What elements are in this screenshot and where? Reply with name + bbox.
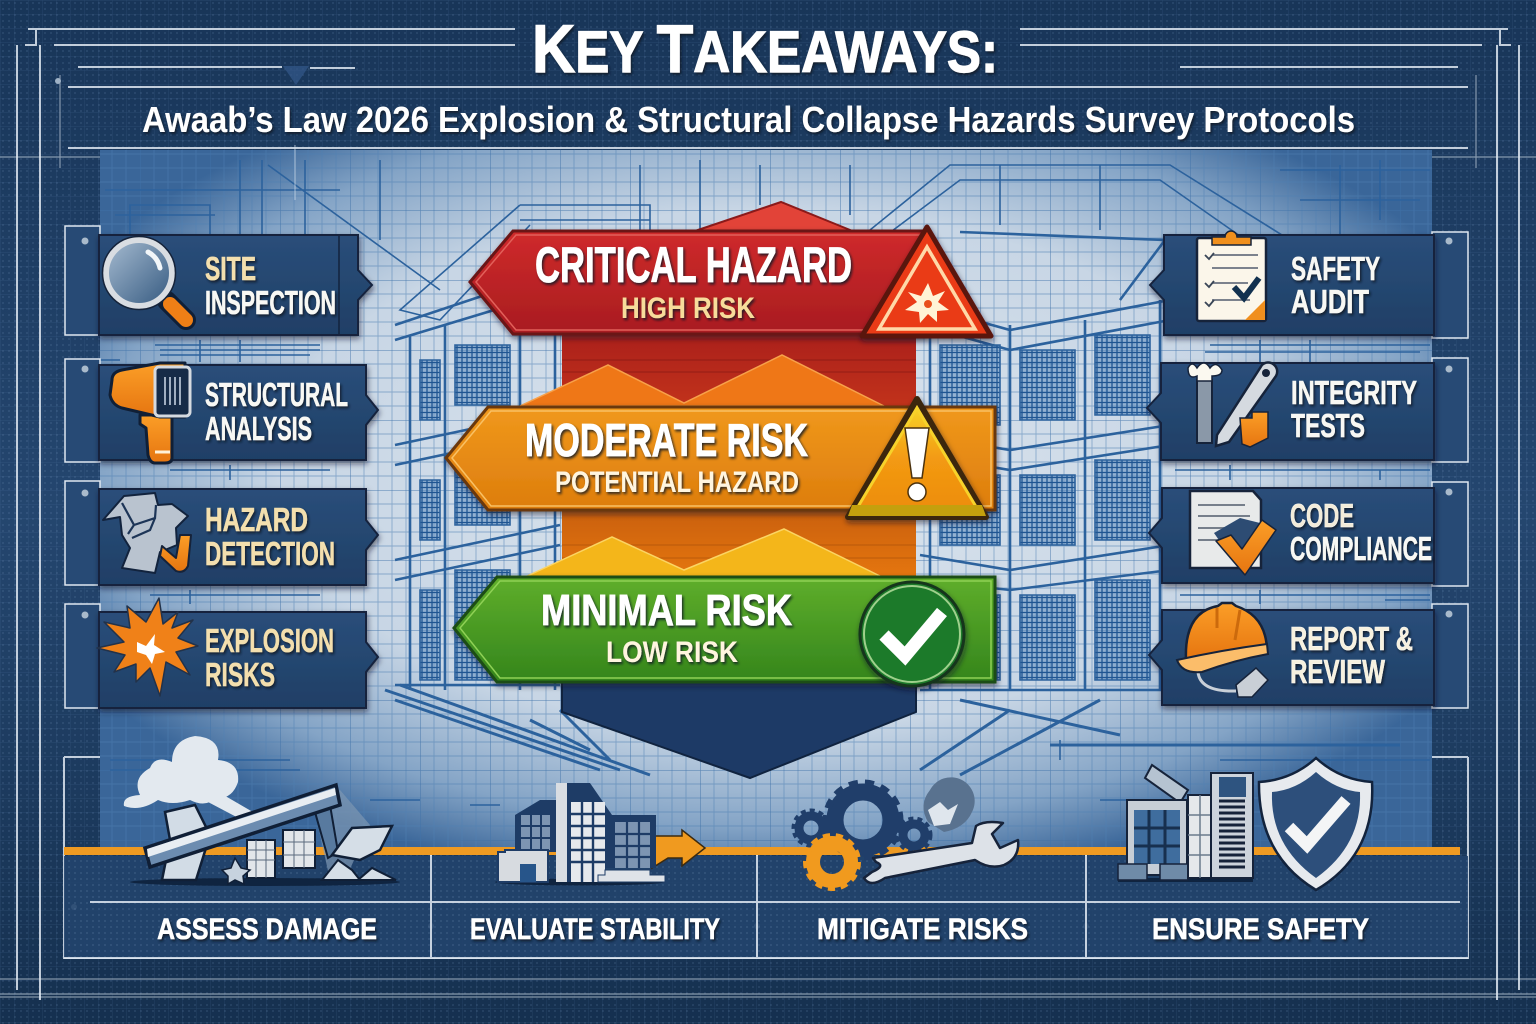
card: code compliance xyxy=(1149,482,1468,586)
central risk stack xyxy=(446,202,995,778)
card: report and review xyxy=(1149,603,1468,708)
blueprint panel xyxy=(100,150,1432,855)
panel: right column xyxy=(1147,231,1468,708)
icon: document with check xyxy=(1190,491,1276,575)
card: site inspection xyxy=(65,226,372,335)
label: high risk: HIGH RISK xyxy=(621,292,755,325)
label: integrity tests: TESTS xyxy=(1291,407,1365,444)
label: structural analysis: ANALYSIS xyxy=(205,410,312,447)
icon: building and shield xyxy=(1118,758,1372,890)
card: structural analysis xyxy=(65,359,378,463)
panel: left column xyxy=(65,226,378,708)
label: safety audit: AUDIT xyxy=(1291,283,1369,320)
icon: hard hat with headset xyxy=(1177,603,1268,697)
label: ensure safety: ENSURE SAFETY xyxy=(1152,913,1369,946)
icon: green check badge xyxy=(860,582,964,686)
icon: explosion warning triangle xyxy=(862,227,991,336)
label: code compliance: CODE xyxy=(1290,497,1354,534)
subtitle: Awaab’s Law 2026 Explosion & Structural Collapse Hazards Survey Protocols xyxy=(142,99,1355,140)
label: safety audit: SAFETY xyxy=(1291,250,1380,287)
icon: collapsed beam and rubble xyxy=(124,736,400,886)
icon: cracked rock with check xyxy=(103,493,191,573)
label: mitigate risks: MITIGATE RISKS xyxy=(817,913,1028,946)
card: integrity tests xyxy=(1147,358,1468,462)
label: structural analysis: STRUCTURAL xyxy=(205,376,348,413)
heading: critical hazard: CRITICAL HAZARD xyxy=(535,237,852,293)
icon: warning triangle xyxy=(848,399,986,517)
label: assess damage: ASSESS DAMAGE xyxy=(157,913,377,946)
icon: hammer, ruler and check xyxy=(1188,363,1277,447)
label: explosion risks: EXPLOSION xyxy=(205,622,334,659)
label: hazard detection: HAZARD xyxy=(205,501,308,538)
label: low risk: LOW RISK xyxy=(606,636,738,669)
label: evaluate stability: EVALUATE STABILITY xyxy=(470,913,720,946)
stack columns and peaks xyxy=(520,202,916,778)
heading: moderate risk: MODERATE RISK xyxy=(525,414,808,466)
ribbon: moderate risk xyxy=(446,399,995,517)
label: potential hazard: POTENTIAL HAZARD xyxy=(555,466,799,499)
icon: buildings with arrow xyxy=(495,783,705,886)
orange timeline xyxy=(64,847,1460,855)
ribbon: critical hazard xyxy=(470,227,991,336)
ribbon: minimal risk xyxy=(454,577,995,686)
label: explosion risks: RISKS xyxy=(205,656,275,693)
label: report and review: REVIEW xyxy=(1290,653,1386,690)
label: integrity tests: INTEGRITY xyxy=(1291,374,1417,411)
icon: handheld scanner xyxy=(110,363,190,463)
icon: explosion burst xyxy=(97,598,198,696)
title: KEY TAKEAWAYS: xyxy=(532,11,998,87)
label: site inspection: SITE xyxy=(205,250,256,287)
heading: minimal risk: MINIMAL RISK xyxy=(541,586,792,635)
label: code compliance: COMPLIANCE xyxy=(1290,530,1432,567)
card: hazard detection xyxy=(65,481,378,585)
icon: clipboard xyxy=(1197,231,1266,321)
label: site inspection: INSPECTION xyxy=(205,284,336,321)
label: report and review: REPORT & xyxy=(1290,620,1413,657)
icon: magnifying glass xyxy=(102,236,186,320)
label: hazard detection: DETECTION xyxy=(205,535,335,572)
bottom band xyxy=(64,855,1468,958)
building blueprint sketch xyxy=(100,160,1430,805)
card: explosion risks xyxy=(65,598,378,708)
card: safety audit xyxy=(1150,231,1468,338)
icon: gears and wrench xyxy=(794,777,1018,888)
